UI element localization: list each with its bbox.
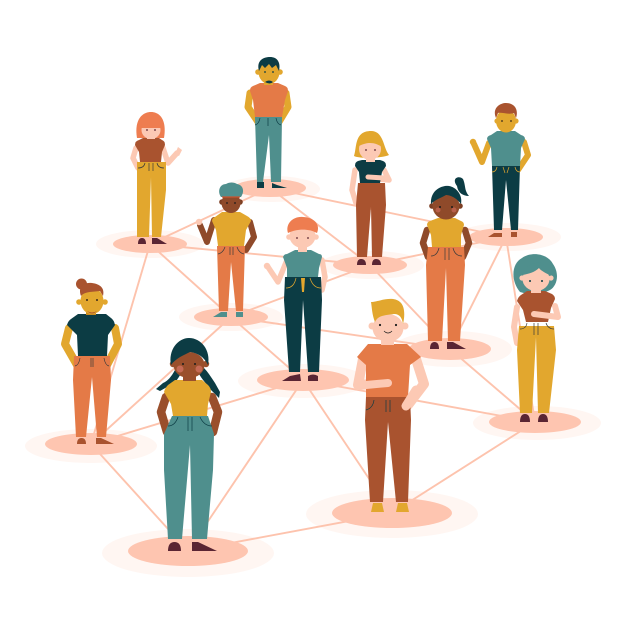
person: woman in teal top and dark jeans bbox=[264, 217, 325, 381]
person: man in orange tee, top centre bbox=[248, 57, 288, 188]
person: woman with teal hair, mustard trousers bbox=[513, 254, 558, 422]
person: woman with braids, teal trousers, front left bbox=[156, 338, 220, 551]
network connection lines bbox=[91, 188, 535, 551]
person: man with hair bun in dark tee, left bbox=[65, 278, 118, 444]
disc halos bbox=[25, 176, 601, 577]
person: blonde woman in dark top and rust trousers bbox=[352, 131, 389, 265]
person: blond man in orange tee and rust trousers, front bbox=[357, 299, 424, 512]
person: man with teal curly hair bbox=[196, 182, 254, 317]
person: woman in rust top and mustard trousers bbox=[133, 112, 182, 244]
node discs bbox=[45, 179, 581, 566]
person: woman with ponytail, orange trousers bbox=[423, 177, 469, 349]
person: man in teal tee, top right bbox=[470, 103, 528, 237]
